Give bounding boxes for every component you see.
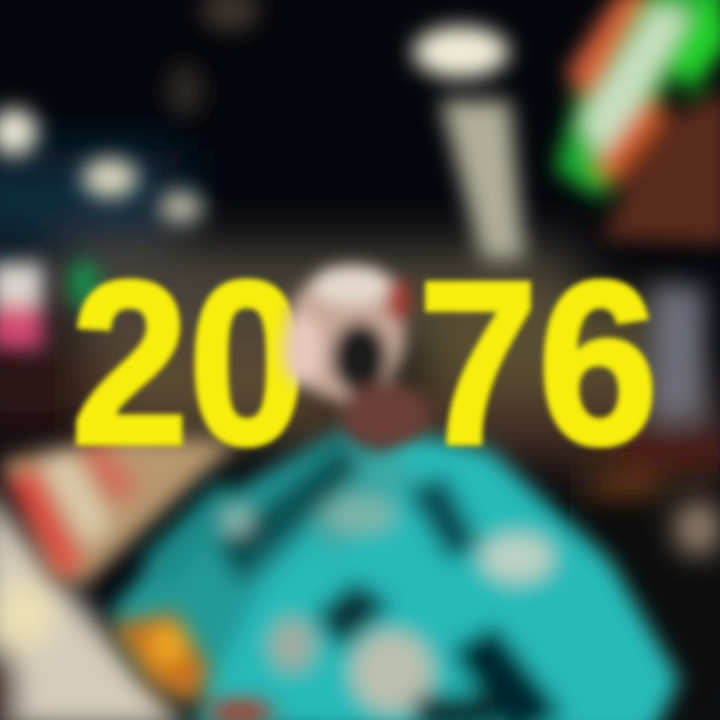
title number: 2076 xyxy=(71,234,658,493)
floor: cream, lower left xyxy=(0,480,190,720)
flag: green white orange, top right xyxy=(555,0,720,245)
arena midground band xyxy=(0,150,720,720)
left flag xyxy=(0,260,100,350)
ceiling lights xyxy=(0,0,525,260)
teal race car xyxy=(110,425,680,720)
orange car detail xyxy=(110,612,274,720)
right side stands xyxy=(590,285,720,556)
title number: 2076: 76 xyxy=(418,234,658,493)
soccer ball xyxy=(282,265,430,447)
striped red object xyxy=(0,435,240,585)
title number: 2076: 20 xyxy=(71,234,306,493)
